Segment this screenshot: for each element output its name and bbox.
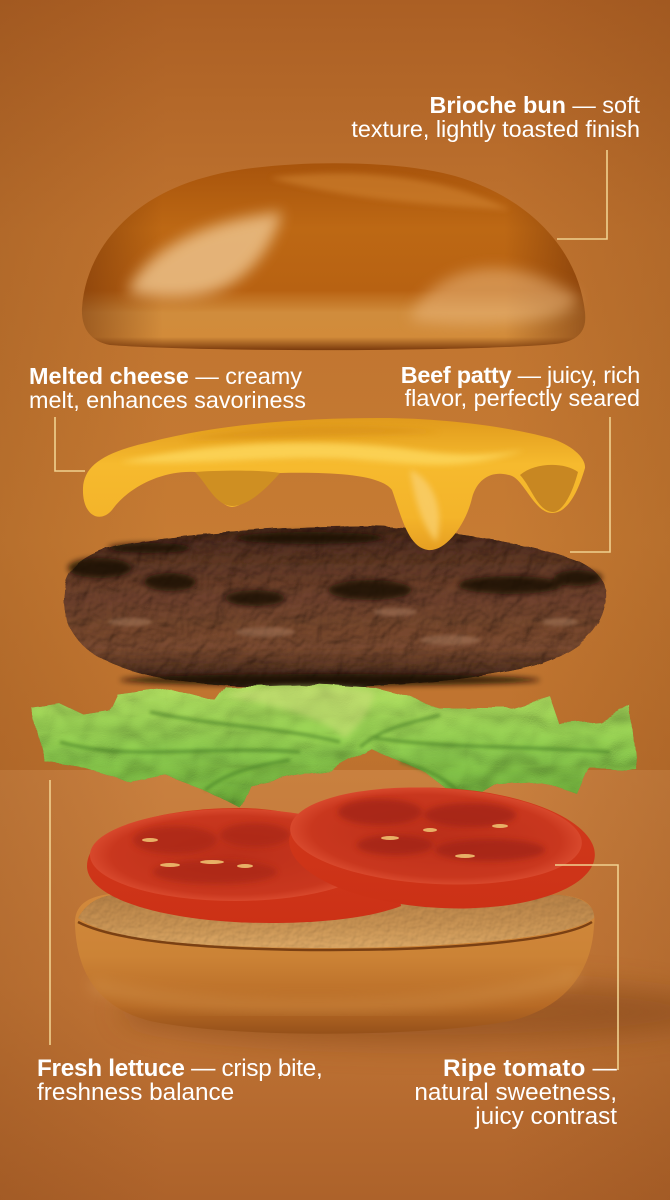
right tomato slice (286, 780, 598, 916)
background wall (0, 0, 670, 772)
label: fresh lettuce: freshness balance (37, 1079, 234, 1106)
label: fresh lettuce: Fresh lettuce — crisp bite, (37, 1055, 322, 1082)
label: beef patty: flavor, perfectly seared (405, 385, 640, 411)
leader lines (50, 150, 618, 1070)
top brioche bun (82, 163, 585, 350)
bottom bun (75, 893, 594, 1034)
label: ripe tomato: juicy contrast (474, 1103, 617, 1130)
cheese slice (83, 418, 585, 550)
table shadow (120, 980, 670, 1044)
label: melted cheese: Melted cheese — creamy (29, 363, 302, 389)
beef patty (64, 526, 606, 688)
label: ripe tomato: Ripe tomato — (443, 1055, 617, 1082)
label: beef patty: Beef patty — juicy, rich (401, 362, 640, 388)
label: brioche bun: Brioche bun — soft (429, 92, 640, 118)
lettuce (32, 684, 637, 808)
left tomato slice (87, 808, 401, 923)
table surface (0, 770, 670, 1200)
label: brioche bun: texture, lightly toasted finish (351, 116, 640, 142)
label: melted cheese: melt, enhances savoriness (29, 387, 306, 413)
label: ripe tomato: natural sweetness, (414, 1079, 617, 1106)
